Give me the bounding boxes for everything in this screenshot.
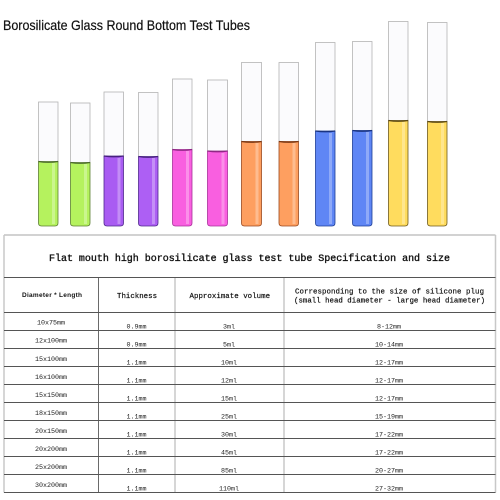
column: approximate volume: 85ml: [221, 468, 237, 476]
column: diameter and length: 15x100mm: [35, 356, 67, 364]
specification table: [4, 235, 496, 494]
column: approximate volume: 110ml: [219, 486, 239, 494]
column: approximate volume: 25ml: [221, 414, 237, 422]
column headers: (small head diameter - large head diameter): [294, 298, 485, 306]
column: silicone plug size: 17-22mm: [375, 450, 403, 458]
column: diameter and length: 30x200mm: [35, 482, 67, 490]
column: diameter and length: 10x75mm: [37, 320, 65, 328]
column: thickness: 1.1mm: [126, 360, 147, 368]
column: diameter and length: 25x200mm: [35, 464, 67, 472]
column: diameter and length: 12x100mm: [35, 338, 67, 346]
column: thickness: 1.1mm: [126, 396, 147, 404]
tube 7: orange: [242, 62, 262, 226]
column: silicone plug size: 12-17mm: [375, 396, 403, 404]
tube 4: purple: [138, 92, 158, 226]
column: diameter and length: 20x150mm: [35, 428, 67, 436]
column: approximate volume: 15ml: [221, 396, 237, 404]
column: approximate volume: 5ml: [223, 342, 235, 350]
column: thickness: 1.1mm: [126, 450, 147, 458]
table heading: Flat mouth high borosilicate glass test tube Specification and size: [49, 253, 450, 265]
column: diameter and length: [35, 320, 67, 490]
column: thickness: 1.1mm: [126, 468, 147, 476]
column: diameter and length: 18x150mm: [35, 410, 67, 418]
tube 10: blue: [352, 42, 372, 226]
column: diameter and length: 20x200mm: [35, 446, 67, 454]
column headers: Corresponding to the size of silicone plug: [295, 288, 484, 296]
column: diameter and length: 15x150mm: [35, 392, 67, 400]
tube 11: yellow: [388, 22, 408, 226]
column: thickness: 0.9mm: [126, 324, 147, 332]
column: approximate volume: 10ml: [221, 360, 237, 368]
column: silicone plug size: 17-22mm: [375, 432, 403, 440]
column: thickness: 1.1mm: [126, 432, 147, 440]
column: approximate volume: 45ml: [221, 450, 237, 458]
column: silicone plug size: [375, 324, 403, 494]
column: silicone plug size: 12-17mm: [375, 378, 403, 386]
tube 9: blue: [316, 42, 335, 226]
column: thickness: 0.9mm: [126, 342, 147, 350]
column: approximate volume: 30ml: [221, 432, 237, 440]
column: thickness: [126, 324, 147, 494]
tube 6: pink: [208, 80, 228, 226]
column: silicone plug size: 20-27mm: [375, 468, 403, 476]
title: Borosilicate Glass Round Bottom Test Tubes: [3, 17, 250, 33]
test tube row: [38, 22, 447, 226]
tube 12: yellow: [428, 22, 447, 226]
table grid: [4, 235, 496, 492]
column: silicone plug size: 15-19mm: [375, 414, 403, 422]
tube 2: green: [70, 103, 90, 226]
column: approximate volume: 12ml: [221, 378, 237, 386]
column: diameter and length: 16x100mm: [35, 374, 67, 382]
column: approximate volume: [219, 324, 239, 494]
column: thickness: 1.1mm: [126, 414, 147, 422]
tube 3: purple: [104, 92, 124, 226]
column headers: Diameter * Length: [22, 292, 82, 299]
column: thickness: 1.1mm: [126, 486, 147, 494]
column: approximate volume: 3ml: [223, 324, 235, 332]
column headers: Approximate volume: [190, 293, 270, 301]
tube 5: pink: [172, 79, 192, 226]
column: silicone plug size: 8-12mm: [377, 324, 401, 332]
column: silicone plug size: 12-17mm: [375, 360, 403, 368]
column: silicone plug size: 27-32mm: [375, 486, 403, 494]
column headers: [22, 288, 485, 306]
column headers: Thickness: [117, 293, 157, 301]
tube 1: green: [38, 102, 58, 226]
column: silicone plug size: 10-14mm: [375, 342, 403, 350]
tube 8: orange: [279, 62, 298, 226]
column: thickness: 1.1mm: [126, 378, 147, 386]
